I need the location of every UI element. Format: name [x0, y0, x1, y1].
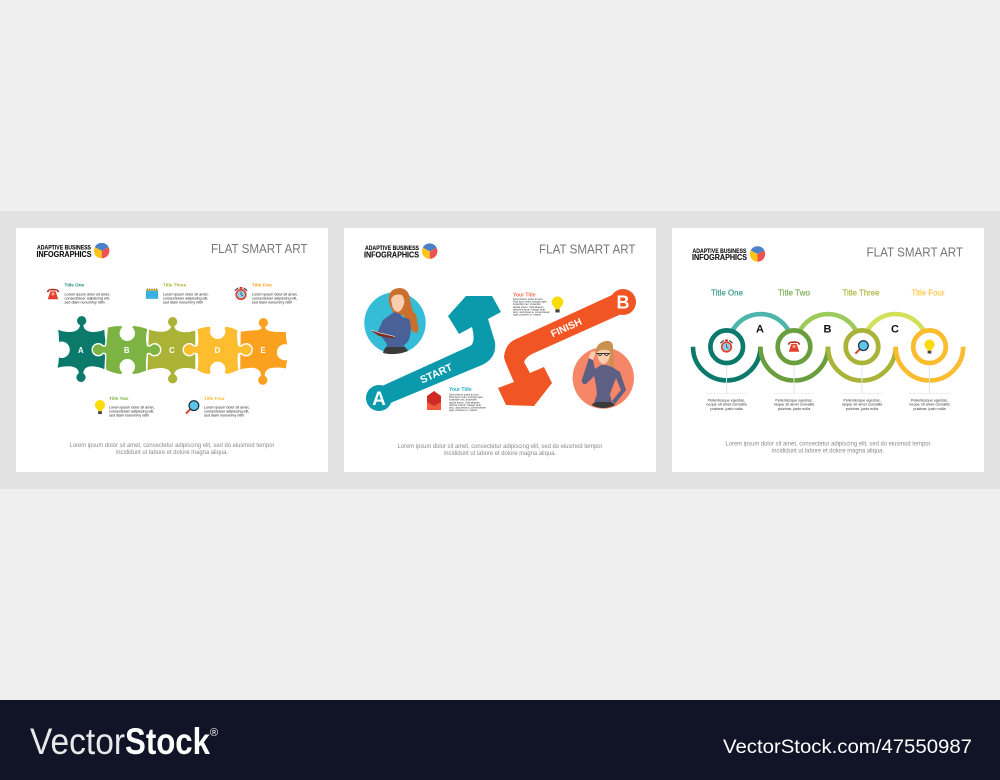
logo [36, 243, 109, 259]
panel background [16, 228, 328, 472]
piece D [183, 326, 252, 375]
step descriptions [706, 398, 950, 411]
item: title five: Lorem ipsum dolor sit amet, [252, 292, 298, 296]
connector arcs [732, 314, 924, 332]
callout: bottom your title: imperdiet nec, imperdiet [449, 398, 477, 402]
callout: bottom your title: arcu, accumsan a, consectetuer [449, 406, 486, 410]
callout: bottom your title: Your Title [449, 387, 472, 393]
footer text: incididunt ut labore et dolore magna aliqua. [772, 448, 884, 454]
piece B [92, 325, 161, 375]
item: title five [235, 282, 298, 304]
callout: bottom your title: Sed pretium turpis at arcu. [449, 392, 480, 396]
callout: top your title: Duis arcu tortor, suscipit eget, [513, 300, 547, 304]
item: title four: consectetuer adipiscing elit, [204, 409, 249, 413]
step descriptions: pulvinar, justo nulla [913, 407, 947, 411]
item: title one: sed diam nonummy nibh [64, 300, 105, 304]
callout: top your title: arcu, accumsan a, consectetuer [513, 310, 550, 314]
ring icons [720, 339, 935, 354]
logo: ADAPTIVE BUSINESS [692, 248, 746, 255]
logo [364, 243, 437, 260]
callout: bottom your title: Duis arcu tortor, suscipit eget, [449, 395, 483, 399]
notebook [371, 330, 395, 338]
heading: FLAT SMART ART [539, 242, 636, 256]
orange finish arrow: FINISH [549, 317, 584, 340]
item: title two: consectetuer adipiscing elit, [109, 409, 154, 413]
callout: top your title: Your Title [513, 292, 536, 298]
item: title five: sed diam nonummy nibh [252, 300, 292, 304]
step titles [711, 288, 945, 298]
shirt [378, 312, 411, 352]
step descriptions: neque sit amet convallis [774, 403, 814, 407]
step titles: Title Three [842, 288, 880, 298]
teal start arrow: A [372, 389, 386, 410]
callout: top your title: eget, posuere ut, mauris. [513, 313, 542, 317]
rings [710, 330, 946, 363]
piece C [147, 316, 196, 384]
brand logo [30, 721, 218, 762]
callout: top your title: iaculis ipsum. Sed aliquam [513, 305, 544, 309]
orange finish arrow: B [616, 292, 630, 312]
panel: arrows slide [344, 228, 656, 472]
heading: FLAT SMART ART [866, 244, 963, 260]
callout: top your title [513, 292, 563, 317]
piece E [240, 317, 288, 385]
logo: INFOGRAPHICS [364, 250, 419, 260]
footer text [726, 442, 930, 454]
hair [389, 288, 418, 333]
watermark bar [0, 700, 1000, 780]
arc letters [756, 324, 899, 336]
step titles: Title One [711, 288, 743, 298]
brand logo: Stock [125, 721, 210, 762]
step descriptions: Pellentesque egestas, [708, 398, 745, 402]
step descriptions: pulvinar, justo nulla [846, 407, 879, 411]
item: title four: sed diam nonummy nibh [204, 413, 244, 417]
hand [588, 351, 595, 360]
item: title four [186, 396, 250, 417]
step titles: Title Two [778, 288, 811, 298]
item: title two: Title Two [109, 396, 129, 401]
callout: bottom your title: iaculis ipsum. Sed aliquam [449, 400, 480, 404]
footer text [398, 444, 602, 457]
puzzle letters: B [124, 346, 130, 355]
glasses [596, 354, 610, 356]
step descriptions: Pellentesque egestas, [911, 398, 948, 402]
character: woman with notebook [364, 288, 426, 354]
callout: bottom your title [427, 387, 486, 412]
brand logo: ® [210, 727, 218, 739]
footer text [70, 443, 274, 456]
item: title five: consectetuer adipiscing elit, [252, 296, 297, 300]
callout: top your title: Sed pretium turpis at arcu. [513, 297, 544, 301]
step titles: Title Four [912, 288, 945, 298]
arc letters: B [824, 324, 832, 336]
face [391, 294, 404, 312]
hair [596, 341, 614, 376]
callout: top your title: ultrices mauris. Integer ante [513, 307, 546, 311]
item: title one [47, 282, 110, 304]
face [597, 350, 610, 364]
panel: rings slide [672, 228, 984, 472]
panel: puzzle slide [16, 228, 328, 472]
item: title one: consectetuer adipiscing elit, [64, 296, 110, 300]
callout: top your title: imperdiet nec, imperdiet [513, 302, 541, 306]
item: title three: consectetuer adipiscing elit, [163, 296, 208, 300]
logo: ADAPTIVE BUSINESS [365, 245, 419, 252]
puzzle letters: A [78, 346, 84, 355]
orange finish arrow [498, 289, 636, 406]
step descriptions: neque sit amet convallis [909, 403, 950, 407]
puzzle chart [57, 315, 288, 385]
footer text: incididunt ut labore et dolore magna aliqua. [116, 450, 228, 456]
logo: INFOGRAPHICS [36, 249, 92, 259]
item: title one: Title One [64, 282, 85, 288]
logo [692, 246, 765, 262]
leader lines [706, 366, 950, 394]
shirt [582, 358, 626, 404]
brand logo: Vector [30, 721, 125, 762]
item: title three: Lorem ipsum dolor sit amet, [163, 292, 208, 296]
stock id: VectorStock.com/47550987 [723, 737, 972, 758]
footer text: incididunt ut labore et dolore magna aliqua. [444, 451, 556, 457]
icon: envelope [427, 391, 441, 410]
teal start arrow [366, 296, 501, 411]
item: title three: Title Three [163, 282, 187, 288]
callout: bottom your title: ultrices mauris. Integer ante [449, 403, 482, 407]
step descriptions: Pellentesque egestas, [843, 398, 881, 402]
puzzle letters: C [169, 346, 175, 355]
item: title three [146, 282, 208, 304]
footer text: Lorem ipsum dolor sit amet, consectetur adipiscing elit, sed do eiusmod tempor [726, 442, 930, 448]
step descriptions: neque sit amet convallis [706, 403, 747, 407]
item: title one: Lorem ipsum dolor sit amet, [64, 292, 110, 296]
item: title two: sed diam nonummy nibh [109, 413, 149, 417]
step descriptions: pulvinar, justo nulla [778, 407, 811, 411]
grey band [0, 211, 1000, 489]
puzzle letters: E [260, 346, 266, 355]
character: woman with glasses [573, 341, 634, 409]
step descriptions: neque sit amet convallis [842, 403, 882, 407]
item: title five: Title Five [252, 282, 272, 288]
lower semicircles [693, 347, 963, 381]
item: title four: Title Four [204, 396, 225, 401]
logo: INFOGRAPHICS [692, 252, 747, 262]
skirt [383, 347, 408, 354]
step descriptions: pulvinar, justo nulla [710, 407, 744, 411]
piece A [57, 315, 106, 383]
footer text: Lorem ipsum dolor sit amet, consectetur adipiscing elit, sed do eiusmod tempor [70, 443, 274, 449]
callout: bottom your title: eget, posuere ut, mauris. [449, 408, 478, 412]
heading: FLAT SMART ART [211, 241, 308, 256]
puzzle letters [78, 346, 266, 355]
logo: ADAPTIVE BUSINESS [37, 245, 91, 252]
item: title two [95, 396, 154, 417]
arc letters: A [756, 324, 764, 336]
panel background [344, 228, 656, 472]
item: title three: sed diam nonummy nibh [163, 300, 203, 304]
puzzle letters: D [215, 346, 221, 355]
panel background [672, 228, 984, 472]
step descriptions: Pellentesque egestas, [775, 398, 813, 402]
item: title two: Lorem ipsum dolor sit amet, [109, 405, 154, 409]
teal start arrow: START [418, 361, 455, 386]
skirt [592, 402, 615, 408]
arc letters: C [891, 324, 899, 336]
item: title four: Lorem ipsum dolor sit amet, [204, 405, 250, 409]
footer text: Lorem ipsum dolor sit amet, consectetur adipiscing elit, sed do eiusmod tempor [398, 444, 602, 450]
